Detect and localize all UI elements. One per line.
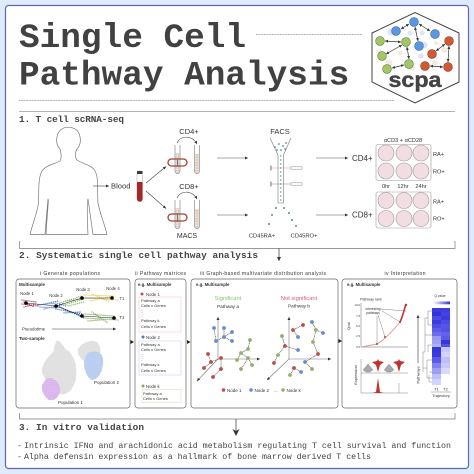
panel: graph-based analysis: Node k [286,388,302,393]
panel: graph-based analysis: Pathway a [217,304,239,309]
logo: scpa hexagon: scpa [388,69,442,92]
panel: generate populations: Population 2 [94,380,120,385]
panel: pathway matrices: Pathway k [141,318,159,323]
panel: pathway matrices: Cells x Genes [141,368,166,373]
plate labels: RO+ [433,170,445,176]
heading: section 2: 2. Systematic single cell pathway analysis [19,250,258,261]
panel: graph-based analysis: Node 1 [227,388,242,393]
panel: pathway matrices: Pathway a [141,298,160,303]
panel: interpretation: 10.0 [355,303,360,307]
arrows: blood to isolation [146,166,166,208]
panel: pathway matrices: Cells x Genes [143,396,168,401]
subtitles: iv Interpretation [384,271,426,277]
panel: interpretation: Qval [347,322,351,330]
subtitles: iii Graph-based multivariate distribution analysis [200,271,326,277]
plate labels: 24hr [415,184,427,190]
panel: generate populations: Node 3 [76,287,90,292]
panel: generate populations: Node 4 [106,286,120,291]
heading: section 1: 1. T cell scRNA-seq [19,114,124,125]
plate labels: RO+ [433,216,445,222]
text block: findings: - [17,453,22,462]
plate labels: RA+ [433,200,444,206]
panel: interpretation: 0.0 [356,345,360,349]
arrows: FACS to plates [316,158,348,215]
panel: interpretation [342,279,457,408]
panel: generate populations: Two-sample [19,336,45,341]
MACS CD8 tubes [168,192,200,228]
icon: blood tube [137,171,142,202]
label: CD8+ plate: CD8+ [352,210,373,220]
panel: pathway matrices: e.g. Multisample [138,282,172,287]
label: MACS: MACS [177,233,197,240]
panel: generate populations [16,279,130,408]
arrowhead: ii to iii [187,340,190,344]
logo: scpa hexagon [372,13,459,103]
panel: graph-based analysis: Significant [215,296,242,302]
panel: interpretation: T1 [434,386,440,392]
panel: interpretation: e.g. Multisample [347,282,381,287]
label: CD4+: CD4+ [179,127,199,136]
plate labels: 0hr [382,184,390,190]
MACS CD4 tubes [168,137,200,174]
label: FACS: FACS [270,127,290,136]
panel: interpretation: 5.0 [356,324,360,328]
arrowhead: iii to iv [338,339,342,343]
panel: pathway matrices: Node 2 [146,335,160,340]
panel: interpretation: Expression [353,365,358,385]
arrowhead: i to ii [130,340,134,344]
well plate: CD4 [376,144,431,180]
panel: pathway matrices: Cells x Genes [141,347,166,352]
text block: findings: - [17,442,22,451]
panel: generate populations: T1 [120,296,125,301]
panel: interpretation: T2 [443,386,449,392]
panel: generate populations: Pseudotime [22,326,46,332]
text block: findings [17,441,451,462]
panel: graph-based analysis [191,279,338,408]
panel: pathway matrices: Pathway k [141,362,159,367]
text block: findings: Alpha defensin expression as a hallmark of bone marrow derived T cells [24,452,371,462]
panel: generate populations: Multisample [19,282,46,287]
panel: graph-based analysis: e.g. Multisample [196,282,230,287]
panel: pathway matrices: Pathway a [141,342,160,347]
label: CD8+: CD8+ [179,182,199,191]
panel: graph-based analysis: ... [274,388,278,393]
panel: graph-based analysis: Node 2 [254,388,270,393]
plate labels [382,152,445,222]
panel: interpretation: Trajectory [432,393,450,398]
label: CD45RO+: CD45RO+ [291,234,318,240]
panel: generate populations: T2 [120,315,125,320]
plate labels: 12hr [397,184,409,190]
panel: interpretation: Pathways [416,366,420,384]
bracket: section 1 to 2 [20,241,455,261]
label: CD4+ plate: CD4+ [352,154,373,163]
title [19,19,349,96]
label: Blood: Blood [111,182,130,190]
panel: interpretation: 7.5 [356,314,360,318]
panel: pathway matrices [135,279,186,408]
panel: pathway matrices: Cells x Genes [141,303,166,308]
panel: generate populations: Node 1 [20,291,34,296]
label: CD45RA+: CD45RA+ [249,234,276,240]
panel: pathway matrices: Node k [146,384,160,389]
panel: interpretation: Q value [434,294,446,298]
panel: pathway matrices: Cells x Genes [141,324,166,329]
FACS sorter [268,138,302,227]
label: anti-CD3 + anti-CD28: αCD3 + αCD28 [384,138,422,144]
panel: pathway matrices: Node 1 [146,292,160,297]
panel: pathway matrices: Pathway a [143,391,162,396]
panel: generate populations: Node 2 [49,293,63,298]
panel: interpretation: pathways [366,311,380,315]
subtitles [40,271,426,277]
title: Pathway Analysis [19,56,349,96]
plate labels: RA+ [433,152,444,158]
panel: interpretation: Interesting [366,307,381,311]
arrow: body to blood [93,185,109,187]
panel: graph-based analysis: Pathway b [288,304,310,308]
panel: interpretation: 2.5 [356,334,360,338]
bracket: section 2 to 3 [20,413,455,436]
arrows: MACS to FACS [217,158,248,215]
icon: human body outline [30,127,107,234]
heading: section 3: 3. In vitro validation [19,422,144,433]
text block: findings: Intrinsic IFNα and arachidonic acid metabolism regulating T cell survival and function [24,441,451,451]
panel: generate populations: Population 1 [58,400,84,405]
well plate: CD8 [376,192,431,228]
title: Single Cell [19,19,246,58]
subtitles: ii Pathway matrices [135,271,186,277]
subtitles: i Generate populations [40,271,100,277]
panel: graph-based analysis: Not significant [281,296,318,302]
panel: interpretation: Pathway rank [360,298,382,302]
